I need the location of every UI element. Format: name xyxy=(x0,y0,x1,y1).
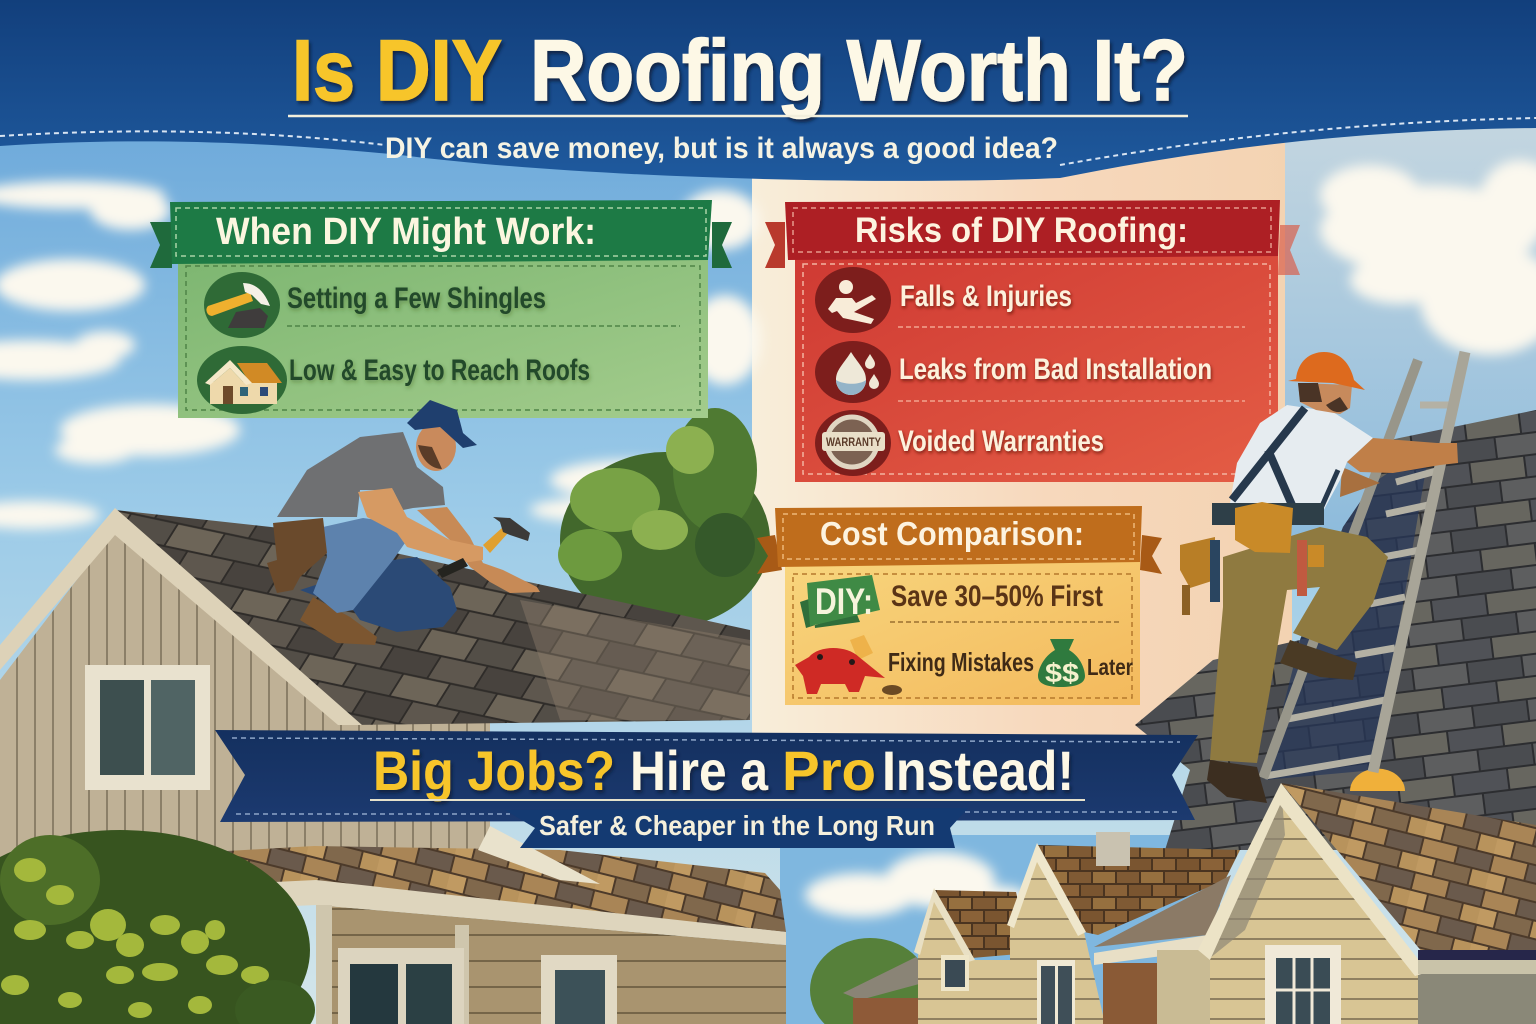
lower leg xyxy=(300,557,457,632)
lower window left xyxy=(338,948,464,1024)
icon: DIY money xyxy=(800,575,880,628)
arm xyxy=(1347,438,1458,473)
hammer xyxy=(437,517,530,578)
yellow ladder foot dome xyxy=(1350,769,1405,791)
middle house window xyxy=(1037,960,1075,1024)
icon: money bag: $$ xyxy=(1045,658,1079,688)
item: warranties: Voided Warranties xyxy=(898,425,1104,458)
red banner: Risks of DIY Roofing: xyxy=(855,211,1188,250)
item: save: Save 30–50% First xyxy=(891,580,1103,613)
icon: broken piggy bank xyxy=(795,635,902,695)
cap xyxy=(407,400,477,448)
banner headline: Instead! xyxy=(882,739,1074,802)
professional roofer on ladder xyxy=(1180,352,1458,803)
item: falls: Falls & Injuries xyxy=(900,280,1072,313)
house window xyxy=(1265,945,1341,1024)
shirt xyxy=(1230,405,1373,517)
upper leg xyxy=(313,518,407,613)
icon: DIY money: DIY: xyxy=(815,581,873,622)
gable window xyxy=(85,665,210,790)
icon: hammer and shingles xyxy=(204,272,280,338)
banner headline xyxy=(373,739,1074,802)
icon: money bag xyxy=(1038,639,1085,688)
shirt xyxy=(277,432,445,517)
banner headline: Pro xyxy=(782,739,876,802)
subtitle: DIY can save money, but is it always a good idea? xyxy=(385,132,1058,165)
panel: risks of DIY roofing xyxy=(765,200,1300,482)
diy homeowner on roof xyxy=(267,400,540,645)
panel: when DIY might work xyxy=(150,200,732,418)
bottom banner xyxy=(215,730,1198,848)
red banner xyxy=(785,200,1280,260)
icon: house xyxy=(197,346,287,414)
item: low roofs: Low & Easy to Reach Roofs xyxy=(289,354,590,387)
front arm xyxy=(358,488,483,563)
banner subline: Safer & Cheaper in the Long Run xyxy=(539,810,935,841)
icon: warranty badge xyxy=(815,410,891,476)
icon: falling person xyxy=(815,267,891,333)
icon: warranty badge: WARRANTY xyxy=(826,435,881,449)
lower left house xyxy=(107,826,786,1024)
right slate roof xyxy=(1135,410,1536,850)
banner headline: Hire a xyxy=(630,739,769,802)
tree behind left roof xyxy=(558,408,770,628)
boot xyxy=(300,597,377,645)
front right house xyxy=(1198,769,1536,1024)
item: later: Later xyxy=(1087,654,1133,680)
orange banner xyxy=(757,506,1162,574)
forward boot xyxy=(1280,640,1357,680)
bush bottom left xyxy=(0,830,315,1024)
green banner xyxy=(150,200,732,268)
back arm xyxy=(417,507,540,593)
item: fixing mistakes: Fixing Mistakes xyxy=(888,647,1034,677)
tool belt xyxy=(1180,502,1324,615)
panel: cost comparison xyxy=(757,506,1162,705)
title: Roofing Worth It? xyxy=(530,23,1188,119)
header band xyxy=(0,0,1536,181)
orange banner: Cost Comparison: xyxy=(820,515,1084,552)
head xyxy=(416,423,456,471)
green banner: When DIY Might Work: xyxy=(216,211,596,253)
item: setting shingles: Setting a Few Shingles xyxy=(287,282,546,315)
harness straps xyxy=(1232,408,1305,505)
tool belt xyxy=(267,518,327,593)
head xyxy=(1298,383,1352,414)
item: leaks: Leaks from Bad Installation xyxy=(899,353,1212,386)
pants xyxy=(1210,527,1388,763)
title xyxy=(292,23,1188,119)
lower window right xyxy=(541,955,617,1024)
far arm xyxy=(1340,467,1380,497)
small house window xyxy=(941,955,969,991)
left house with shingle roof xyxy=(0,508,750,880)
icon: water drops xyxy=(815,341,891,403)
rear boot xyxy=(1207,760,1267,803)
hard hat xyxy=(1288,352,1365,390)
title: Is DIY xyxy=(292,23,502,119)
banner headline: Big Jobs? xyxy=(373,739,615,802)
ladder xyxy=(1263,352,1465,778)
background houses bottom right xyxy=(810,832,1240,1024)
